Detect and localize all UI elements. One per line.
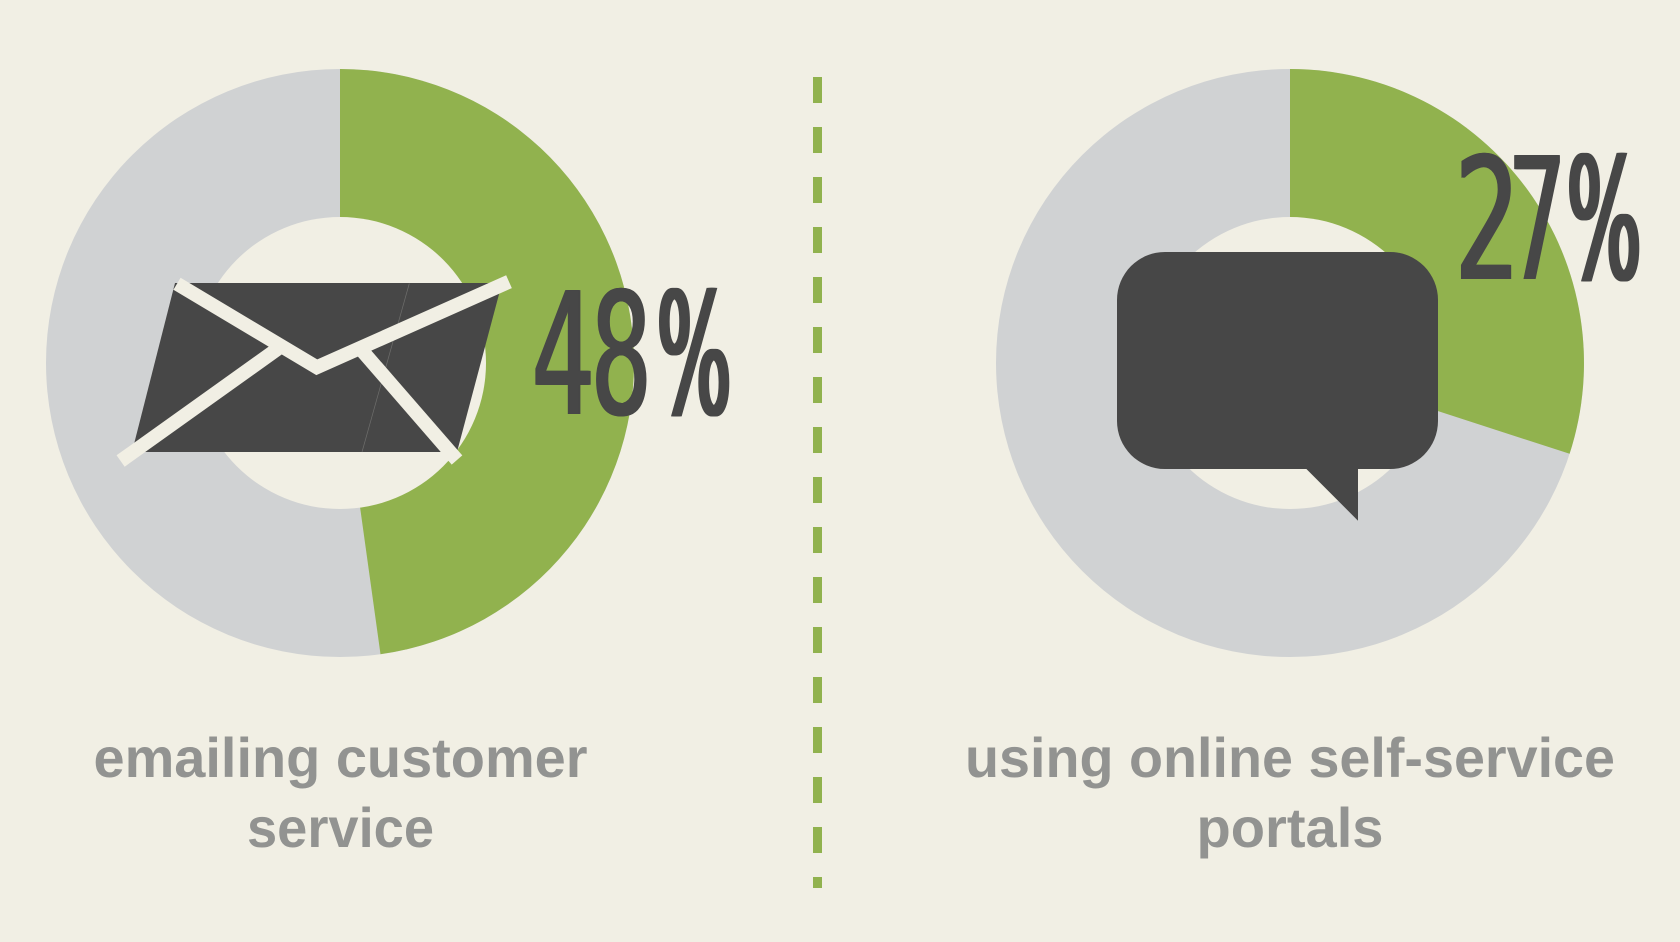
stat: 48%: 4 xyxy=(532,257,595,455)
label: emailing customer service: service xyxy=(247,796,434,859)
label: emailing customer service xyxy=(94,726,588,859)
stat: 27%: 2 xyxy=(1454,122,1519,320)
label: using online self-service portals: portals xyxy=(1196,796,1384,859)
donut chart: 27% xyxy=(996,69,1584,657)
donut chart: 48% xyxy=(46,69,634,657)
icon: envelope xyxy=(121,282,509,461)
stat: 48%: % xyxy=(657,257,731,455)
stat: 48%: 8 xyxy=(591,257,652,455)
icon: speech bubble xyxy=(1117,252,1438,521)
stat: 27%: % xyxy=(1567,122,1641,320)
stat: 48% xyxy=(532,257,731,455)
stat: 27% xyxy=(1454,122,1641,320)
stat: 27%: 7 xyxy=(1508,122,1566,320)
label: emailing customer service: emailing customer xyxy=(94,726,588,789)
label: using online self-service portals: using online self-service xyxy=(965,726,1615,789)
panel: using online self-service portals xyxy=(965,69,1641,859)
label: using online self-service portals xyxy=(965,726,1615,859)
divider: dashed line xyxy=(813,77,822,888)
panel: emailing customer service xyxy=(46,69,731,859)
